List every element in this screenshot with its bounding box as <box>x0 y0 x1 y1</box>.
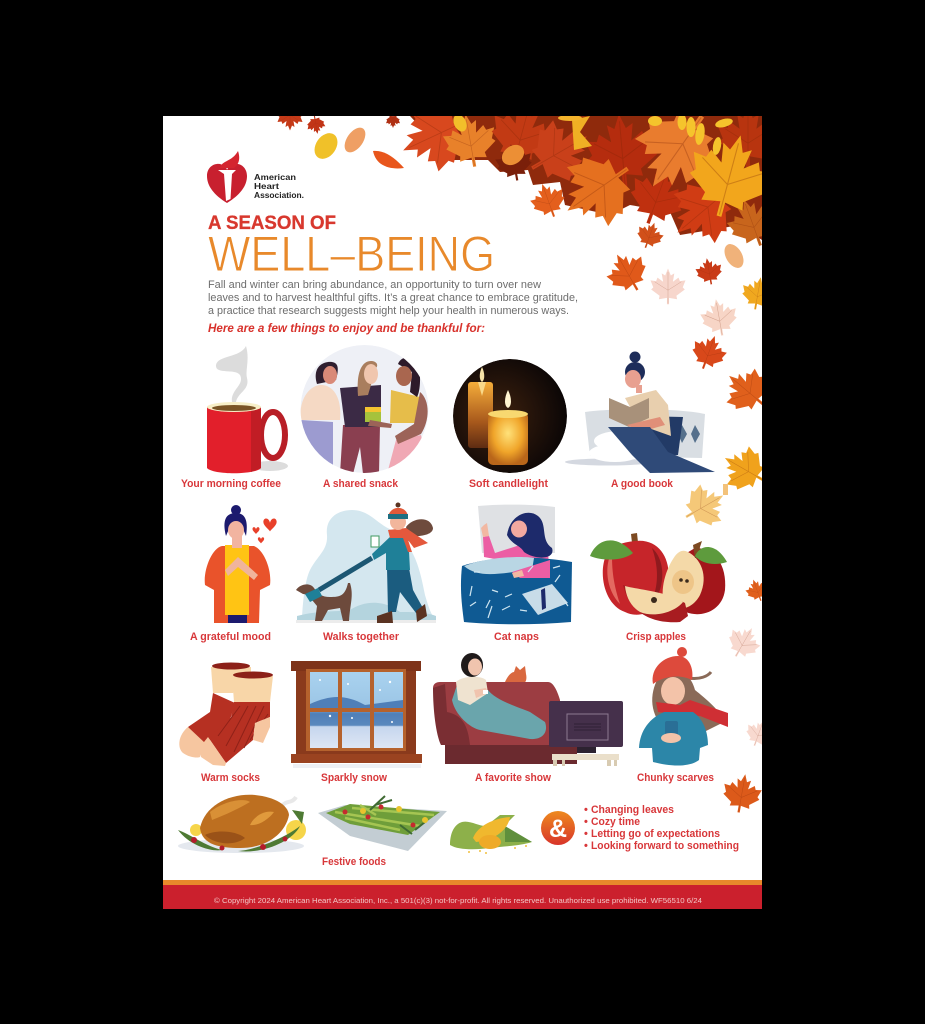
item: grateful mood <box>190 505 277 643</box>
subheading: Here are a few things to enjoy and be thankful for: <box>208 323 485 335</box>
item: crisp apples <box>590 533 727 643</box>
footer band <box>163 880 762 909</box>
item: crisp apples: Crisp apples <box>626 631 686 643</box>
item: festive foods <box>178 795 532 868</box>
bullet list: • <box>584 804 588 816</box>
item: favorite show: A favorite show <box>475 772 551 784</box>
ampersand badge: & <box>549 815 567 843</box>
bullet list: • <box>584 840 588 852</box>
illustration: woman napping under blanket <box>461 505 572 624</box>
illustration: whole and cut apples <box>590 533 727 622</box>
heading: Well-Being: WELL–BEING <box>208 226 495 282</box>
item: chunky scarves: Chunky scarves <box>637 772 714 784</box>
item: festive foods: Festive foods <box>322 856 386 868</box>
intro text <box>208 279 578 317</box>
scattered falling leaves <box>278 105 778 816</box>
icon: hearts <box>252 518 277 543</box>
item: walks together <box>296 502 436 643</box>
bullet list: Looking forward to something <box>591 840 739 852</box>
item: cat naps: Cat naps <box>494 631 539 643</box>
illustration: snowy window <box>291 661 422 768</box>
intro text: leaves and to harvest healthful gifts. It’s a great chance to embrace gratitude, <box>208 292 578 304</box>
logo: American Heart Association <box>207 151 304 203</box>
item: good book <box>565 352 715 490</box>
small accent leaves on canopy <box>453 116 733 166</box>
item: candlelight <box>453 359 567 490</box>
item: good book: A good book <box>611 478 674 490</box>
item: morning coffee: Your morning coffee <box>181 478 281 490</box>
illustration: woman on sofa and TV <box>433 653 623 766</box>
item: sparkly snow <box>291 661 422 784</box>
icon: mug <box>207 402 288 473</box>
bullet list: Changing leaves <box>591 804 674 816</box>
ampersand badge <box>541 811 575 845</box>
item: morning coffee <box>181 346 288 490</box>
intro text: Fall and winter can bring abundance, an opportunity to turn over new <box>208 279 541 291</box>
bullet list <box>584 804 739 852</box>
bullet list: • <box>584 828 588 840</box>
item: warm socks: Warm socks <box>201 772 260 784</box>
item: sparkly snow: Sparkly snow <box>321 772 387 784</box>
illustration: pair of socks <box>179 662 273 766</box>
illustration: green bean casserole <box>318 796 447 851</box>
illustration: roast turkey <box>178 795 306 853</box>
bullet list: Cozy time <box>591 816 640 828</box>
illustration: woman with red scarf and mug <box>639 647 728 766</box>
bullet list: Letting go of expectations <box>591 828 720 840</box>
page background <box>163 116 762 909</box>
item: warm socks <box>179 662 273 784</box>
item: cat naps <box>461 505 572 643</box>
illustration: woman with hands on heart <box>205 505 270 623</box>
bullet list: • <box>584 816 588 828</box>
illustration: three friends <box>300 345 430 474</box>
illustration: two candles <box>453 359 567 473</box>
item: favorite show <box>433 653 623 784</box>
item: shared snack <box>300 345 430 490</box>
item: grateful mood: A grateful mood <box>190 631 271 643</box>
logo: American Heart Association: Association. <box>254 190 304 200</box>
intro text: a practice that research suggests might help your health in numerous ways. <box>208 305 569 317</box>
item: walks together: Walks together <box>323 631 400 643</box>
logo: American Heart Association: American <box>254 172 296 182</box>
icon: steam <box>216 346 248 402</box>
illustration: corn <box>450 815 532 854</box>
autumn leaf canopy, top right <box>403 116 762 246</box>
item: chunky scarves <box>637 647 728 784</box>
heading: A Season of: A SEASON OF <box>208 213 336 234</box>
illustration: woman reading <box>565 352 715 473</box>
icon: heart and torch <box>207 151 247 203</box>
item: candlelight: Soft candlelight <box>469 478 548 490</box>
illustration: woman walking dog in snow <box>296 502 436 623</box>
footer band: © Copyright 2024 American Heart Association, Inc., a 501(c)(3) not-for-profit. All rights reserved. Unauthorized use prohibited. WF56510 6/24 <box>214 896 702 905</box>
logo: American Heart Association: Heart <box>254 181 279 191</box>
item: shared snack: A shared snack <box>323 478 399 490</box>
